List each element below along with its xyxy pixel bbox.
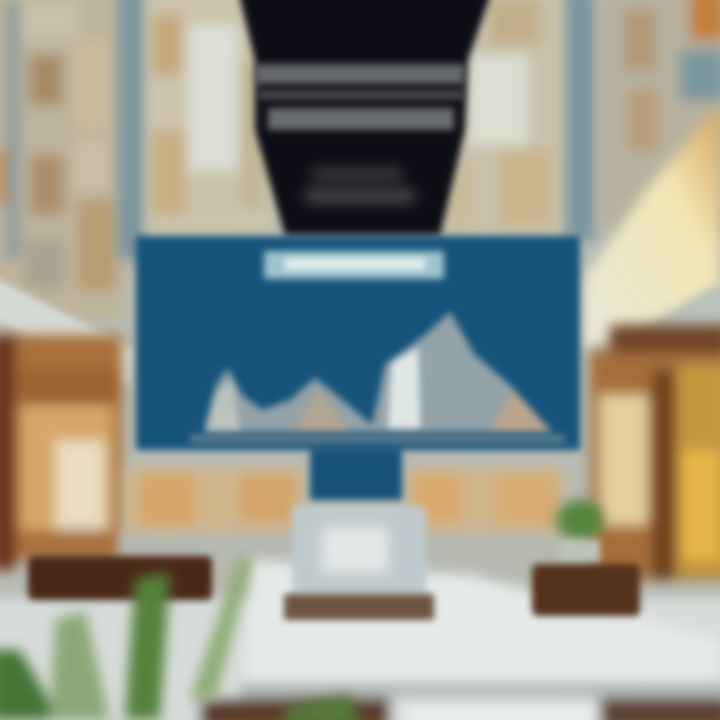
teal column left (118, 0, 146, 260)
right cream canopy (583, 105, 720, 350)
right planter (532, 500, 640, 616)
banner subheading band (305, 168, 415, 204)
left planter (28, 556, 212, 600)
green foliage (0, 555, 360, 720)
panel footer band (190, 434, 565, 444)
table surface (0, 560, 720, 720)
centre-right facade (442, 0, 567, 235)
centre planter card (284, 506, 434, 620)
left canopy (0, 275, 135, 385)
top black banner (238, 0, 492, 235)
panel title band (264, 251, 444, 279)
left wood wall (0, 335, 122, 570)
banner heading band (256, 64, 464, 130)
blue panel (136, 236, 580, 500)
centre-left facade (146, 0, 274, 235)
teal column right (566, 0, 596, 240)
right facade (598, 0, 720, 230)
blue connector below panel (310, 448, 402, 500)
lower window strips (120, 468, 570, 582)
left facade (0, 0, 125, 320)
skyline illustration (204, 312, 552, 432)
right wood wall (590, 325, 720, 580)
